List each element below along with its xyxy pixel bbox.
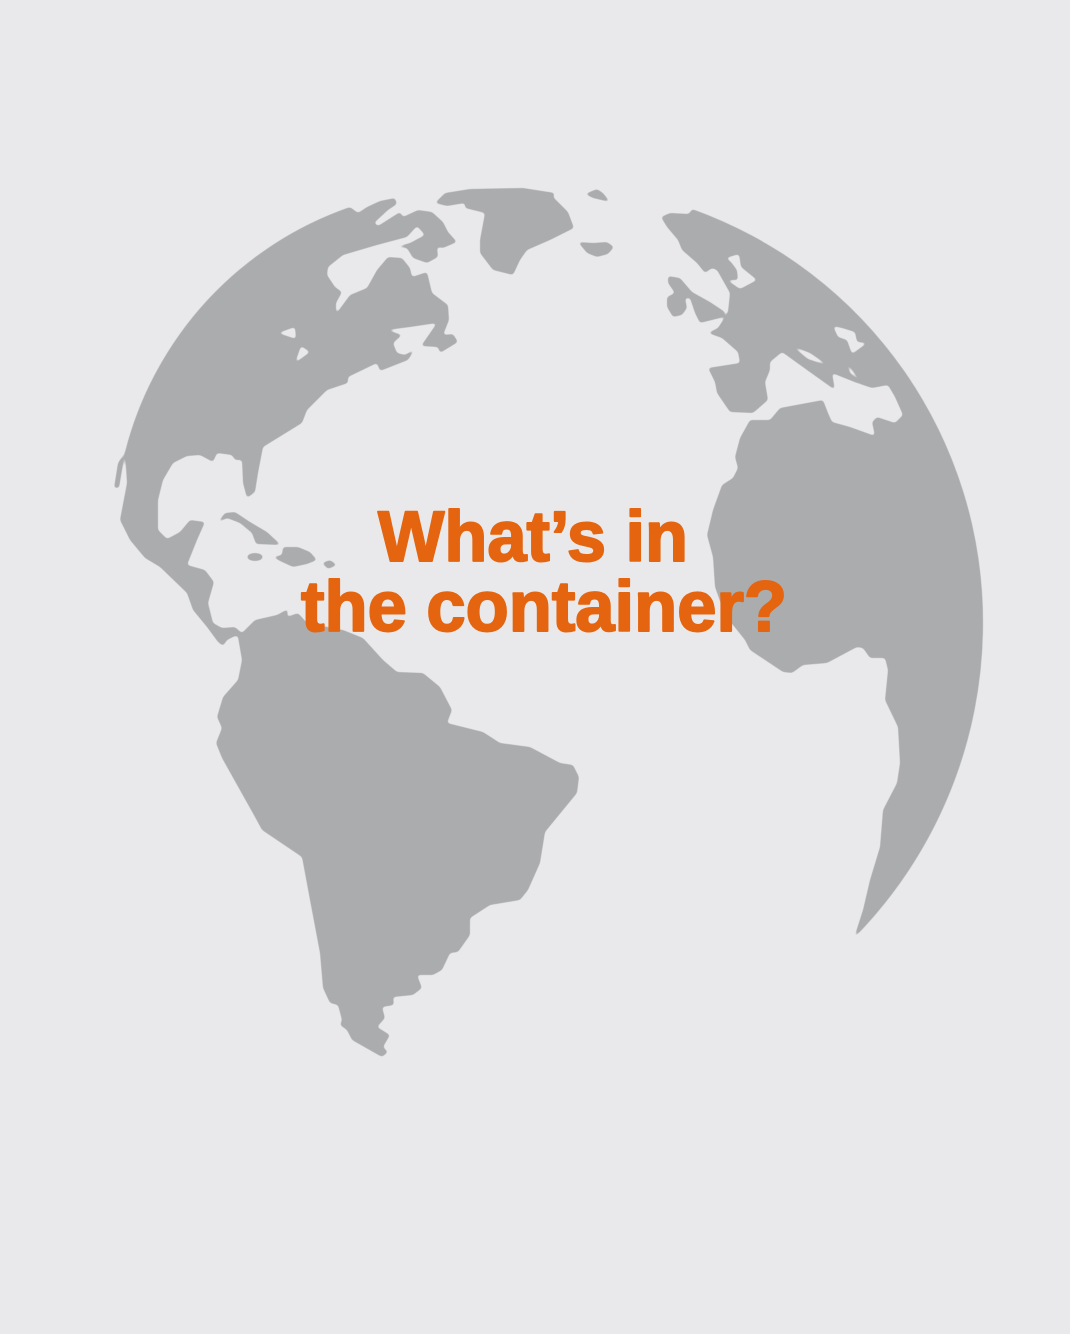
Pacific coast sliver [114,452,125,488]
Svalbard [585,189,610,202]
South America [216,609,579,1057]
icon: globe map [114,188,983,1057]
British Isles [667,276,725,323]
Iceland [578,242,614,257]
Europe and Africa [661,209,983,938]
Greenland [435,188,574,275]
title line 2: the container? [301,568,787,647]
Jamaica [247,553,263,561]
Puerto Rico [322,560,337,569]
North America [120,198,458,646]
title [301,498,787,647]
Cuba [217,512,281,545]
Hispaniola [273,547,317,567]
title line 1: What’s in [378,498,688,577]
